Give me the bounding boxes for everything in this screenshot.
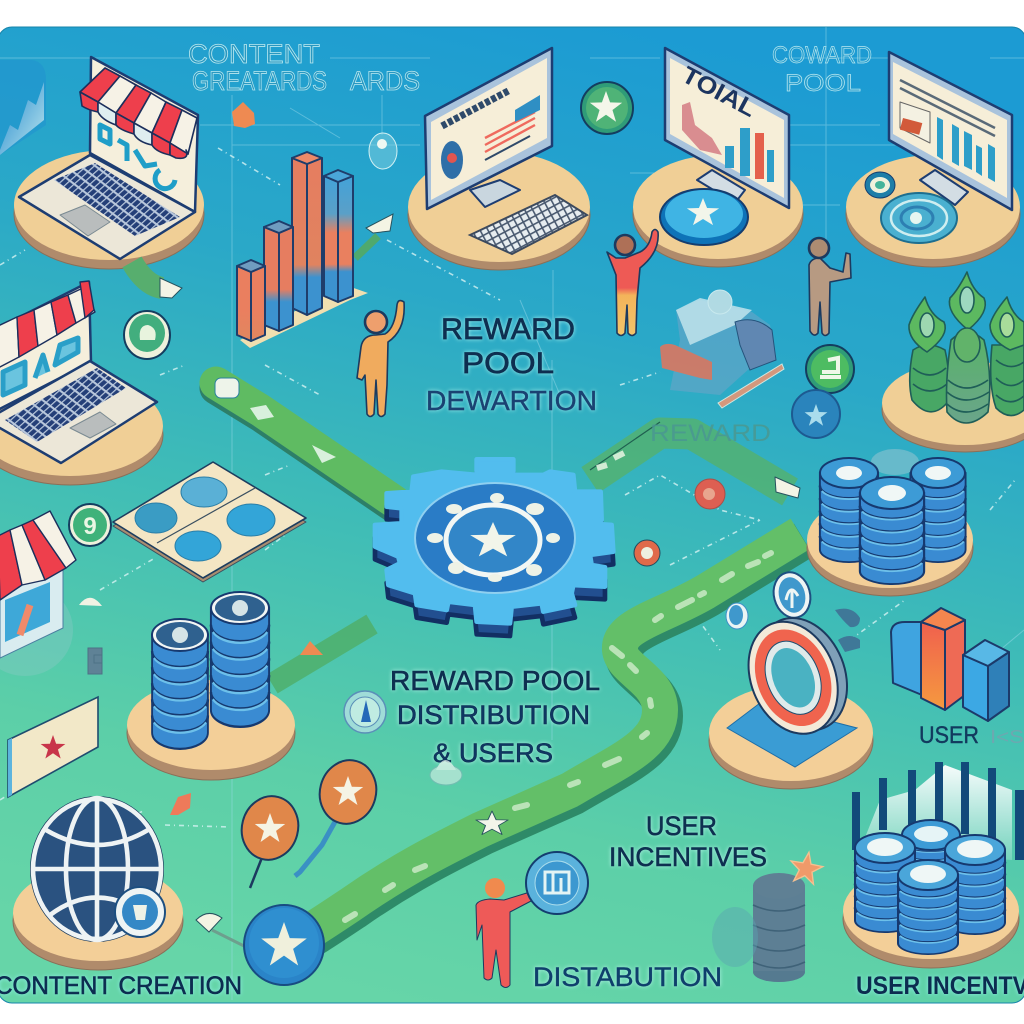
green path: upper left — [215, 378, 395, 507]
gear inner dial — [415, 483, 575, 593]
label: user incentives: USER — [646, 811, 717, 841]
plant left — [909, 297, 949, 412]
icon: orange flag — [170, 793, 191, 815]
bar 3 — [292, 152, 322, 315]
icon: orange star coin two — [295, 754, 383, 876]
label: faint reward: REWARD — [650, 420, 771, 447]
icon: monitor three — [665, 48, 789, 208]
icon: blue star coin on disc — [660, 189, 748, 245]
icon: green nine badge: 9 — [83, 513, 97, 540]
disc: laptop one — [14, 150, 204, 269]
heading: reward pool distribution and users — [390, 665, 600, 768]
icon: striped backdrop — [852, 762, 1024, 860]
bar 4 — [324, 170, 353, 302]
icon: flag card — [8, 697, 98, 797]
arrow: green to bar chart — [355, 214, 393, 258]
label: user incentives: INCENTIVES — [609, 842, 767, 872]
laptop screen — [90, 57, 198, 212]
screen lines — [900, 80, 995, 136]
gear star — [470, 522, 516, 556]
arrow: green from laptop — [132, 262, 182, 298]
right bar — [963, 640, 1009, 721]
gear ring — [446, 505, 540, 575]
right stack — [945, 835, 1005, 934]
arrow: white arrow to star coin — [196, 913, 246, 947]
disc: monitor two — [408, 152, 590, 270]
icon: tiny white arrow — [79, 598, 102, 606]
text: faint heading content rewards: ARDS — [350, 66, 420, 96]
bar 2 — [264, 221, 293, 331]
icon: laptop with storefront — [19, 57, 198, 259]
gear dots — [427, 493, 560, 582]
icon: small blue coin — [726, 603, 748, 629]
screen bars — [937, 117, 995, 182]
icon: blue star coin — [244, 905, 324, 985]
plant centre — [946, 272, 990, 423]
green path: small connector — [272, 624, 372, 684]
icon: blue coin with person — [526, 852, 588, 914]
storefront awning — [80, 68, 197, 158]
icon: two coin stacks — [152, 592, 269, 749]
heading: reward pool distribution and users: REWARD POOL — [390, 665, 600, 696]
icon: small tokens — [835, 609, 860, 652]
awning — [0, 281, 95, 368]
icon: floating coin — [769, 568, 815, 622]
tall bar — [921, 608, 965, 710]
icon: three coin stacks — [820, 449, 966, 584]
awning — [0, 511, 76, 600]
icon: green badge top left — [124, 311, 170, 359]
heading: reward pool distribution and users: & USERS — [433, 738, 553, 768]
icon: monitor four — [889, 52, 1012, 210]
icon: keyboard — [470, 195, 587, 254]
icon: small orange arrow — [300, 641, 323, 655]
back stack — [211, 592, 269, 727]
person: red with coin — [476, 878, 533, 988]
green path: main route — [285, 534, 804, 951]
disc: plants — [882, 361, 1024, 452]
icon: red badge — [695, 479, 725, 509]
laptop screen content — [100, 125, 175, 189]
label: distabution: DISTABUTION — [533, 962, 722, 992]
icon: green star badge — [581, 82, 633, 134]
icon: plants — [909, 272, 1024, 423]
disc: ring emblem — [709, 685, 873, 789]
disc: coin stacks bottom right — [843, 863, 1019, 968]
icon: storefront — [0, 511, 76, 676]
front stack — [898, 860, 958, 954]
person: orange waving — [357, 301, 404, 416]
icon: green badge — [806, 345, 854, 393]
stack left — [820, 458, 878, 562]
heading: reward pool dewartion — [426, 313, 597, 416]
plant right — [990, 297, 1024, 416]
icon: globe badge coin — [115, 887, 165, 937]
left stack — [855, 833, 915, 932]
heading: reward pool dewartion: DEWARTION — [426, 385, 597, 416]
icon: four coin stacks — [855, 820, 1005, 954]
chart: isometric bars — [237, 152, 368, 348]
disc: monitor three — [633, 155, 803, 267]
icon: translucent machine — [660, 290, 784, 408]
back bar — [891, 622, 922, 695]
icon: blue emblem coin — [344, 691, 386, 733]
icon: green nine badge — [69, 504, 111, 546]
disc: globe — [13, 865, 183, 970]
person: tan standing — [809, 238, 851, 336]
chart: user bars — [891, 608, 1009, 721]
text: faint heading content rewards — [188, 39, 420, 96]
icon: monitor two — [425, 48, 552, 209]
text: faint heading content rewards: CONTENT — [188, 39, 320, 69]
icon: orange marker — [232, 102, 255, 128]
label: user incentives — [609, 811, 767, 872]
disc: laptop two — [0, 376, 163, 485]
gear: central reward hub — [375, 459, 613, 636]
screen thumbnail — [900, 102, 930, 143]
heading: reward pool dewartion: REWARD — [441, 313, 575, 346]
icon: ring emblem — [727, 604, 863, 767]
icon: orange star — [788, 849, 825, 885]
front stack — [152, 619, 208, 749]
text: faint heading content rewards: GREATARDS — [192, 66, 327, 96]
text: faint heading reward pool: POOL — [785, 70, 861, 97]
back stack — [902, 820, 960, 894]
icon: grey padlock — [88, 648, 102, 674]
trackpad — [70, 412, 116, 438]
screen bars — [682, 102, 774, 182]
stack front — [860, 477, 924, 584]
icon: ghost swirl — [712, 907, 758, 967]
laptop base — [19, 155, 195, 259]
icon: orange star coin one — [235, 790, 305, 888]
stack right — [910, 458, 966, 562]
icon: grey stack — [753, 873, 805, 982]
disc: coin stacks right — [807, 492, 973, 596]
label: user fragment: USER — [919, 722, 979, 749]
icon: ring token — [865, 172, 895, 198]
disc: coin stacks left — [127, 680, 295, 780]
label: user fragment — [919, 722, 1024, 749]
icon: droplet bubble — [369, 133, 397, 169]
screen content — [442, 90, 510, 126]
icon: swirl coin — [881, 193, 957, 243]
icon: red ring badge — [634, 540, 660, 566]
disc: monitor four — [846, 155, 1020, 267]
heading: reward pool distribution and users: DISTRIBUTION — [397, 700, 590, 730]
heading: reward pool dewartion: POOL — [462, 347, 554, 380]
green path: upper right — [590, 422, 800, 498]
bar 1 — [237, 260, 265, 341]
label: user fragment: I<S — [990, 727, 1024, 747]
coins — [135, 477, 275, 561]
laptop trackpad — [60, 205, 110, 236]
icon: card with four coins — [113, 462, 306, 582]
icon: blue badge — [792, 390, 840, 438]
icon: corner chart — [0, 60, 46, 155]
label: content creation: CONTENT CREATION — [0, 972, 242, 1000]
screen title: TOIAL — [677, 61, 760, 123]
text: faint heading reward pool — [772, 42, 872, 97]
text: faint heading reward pool: COWARD — [772, 42, 872, 69]
icon: white bubble — [430, 760, 462, 785]
icon: laptop two with storefront — [0, 281, 157, 463]
person: red and yellow waving — [607, 230, 658, 336]
keyboard — [5, 368, 126, 442]
laptop keyboard — [54, 163, 180, 236]
icon: globe — [31, 797, 163, 941]
back coin — [871, 449, 919, 475]
